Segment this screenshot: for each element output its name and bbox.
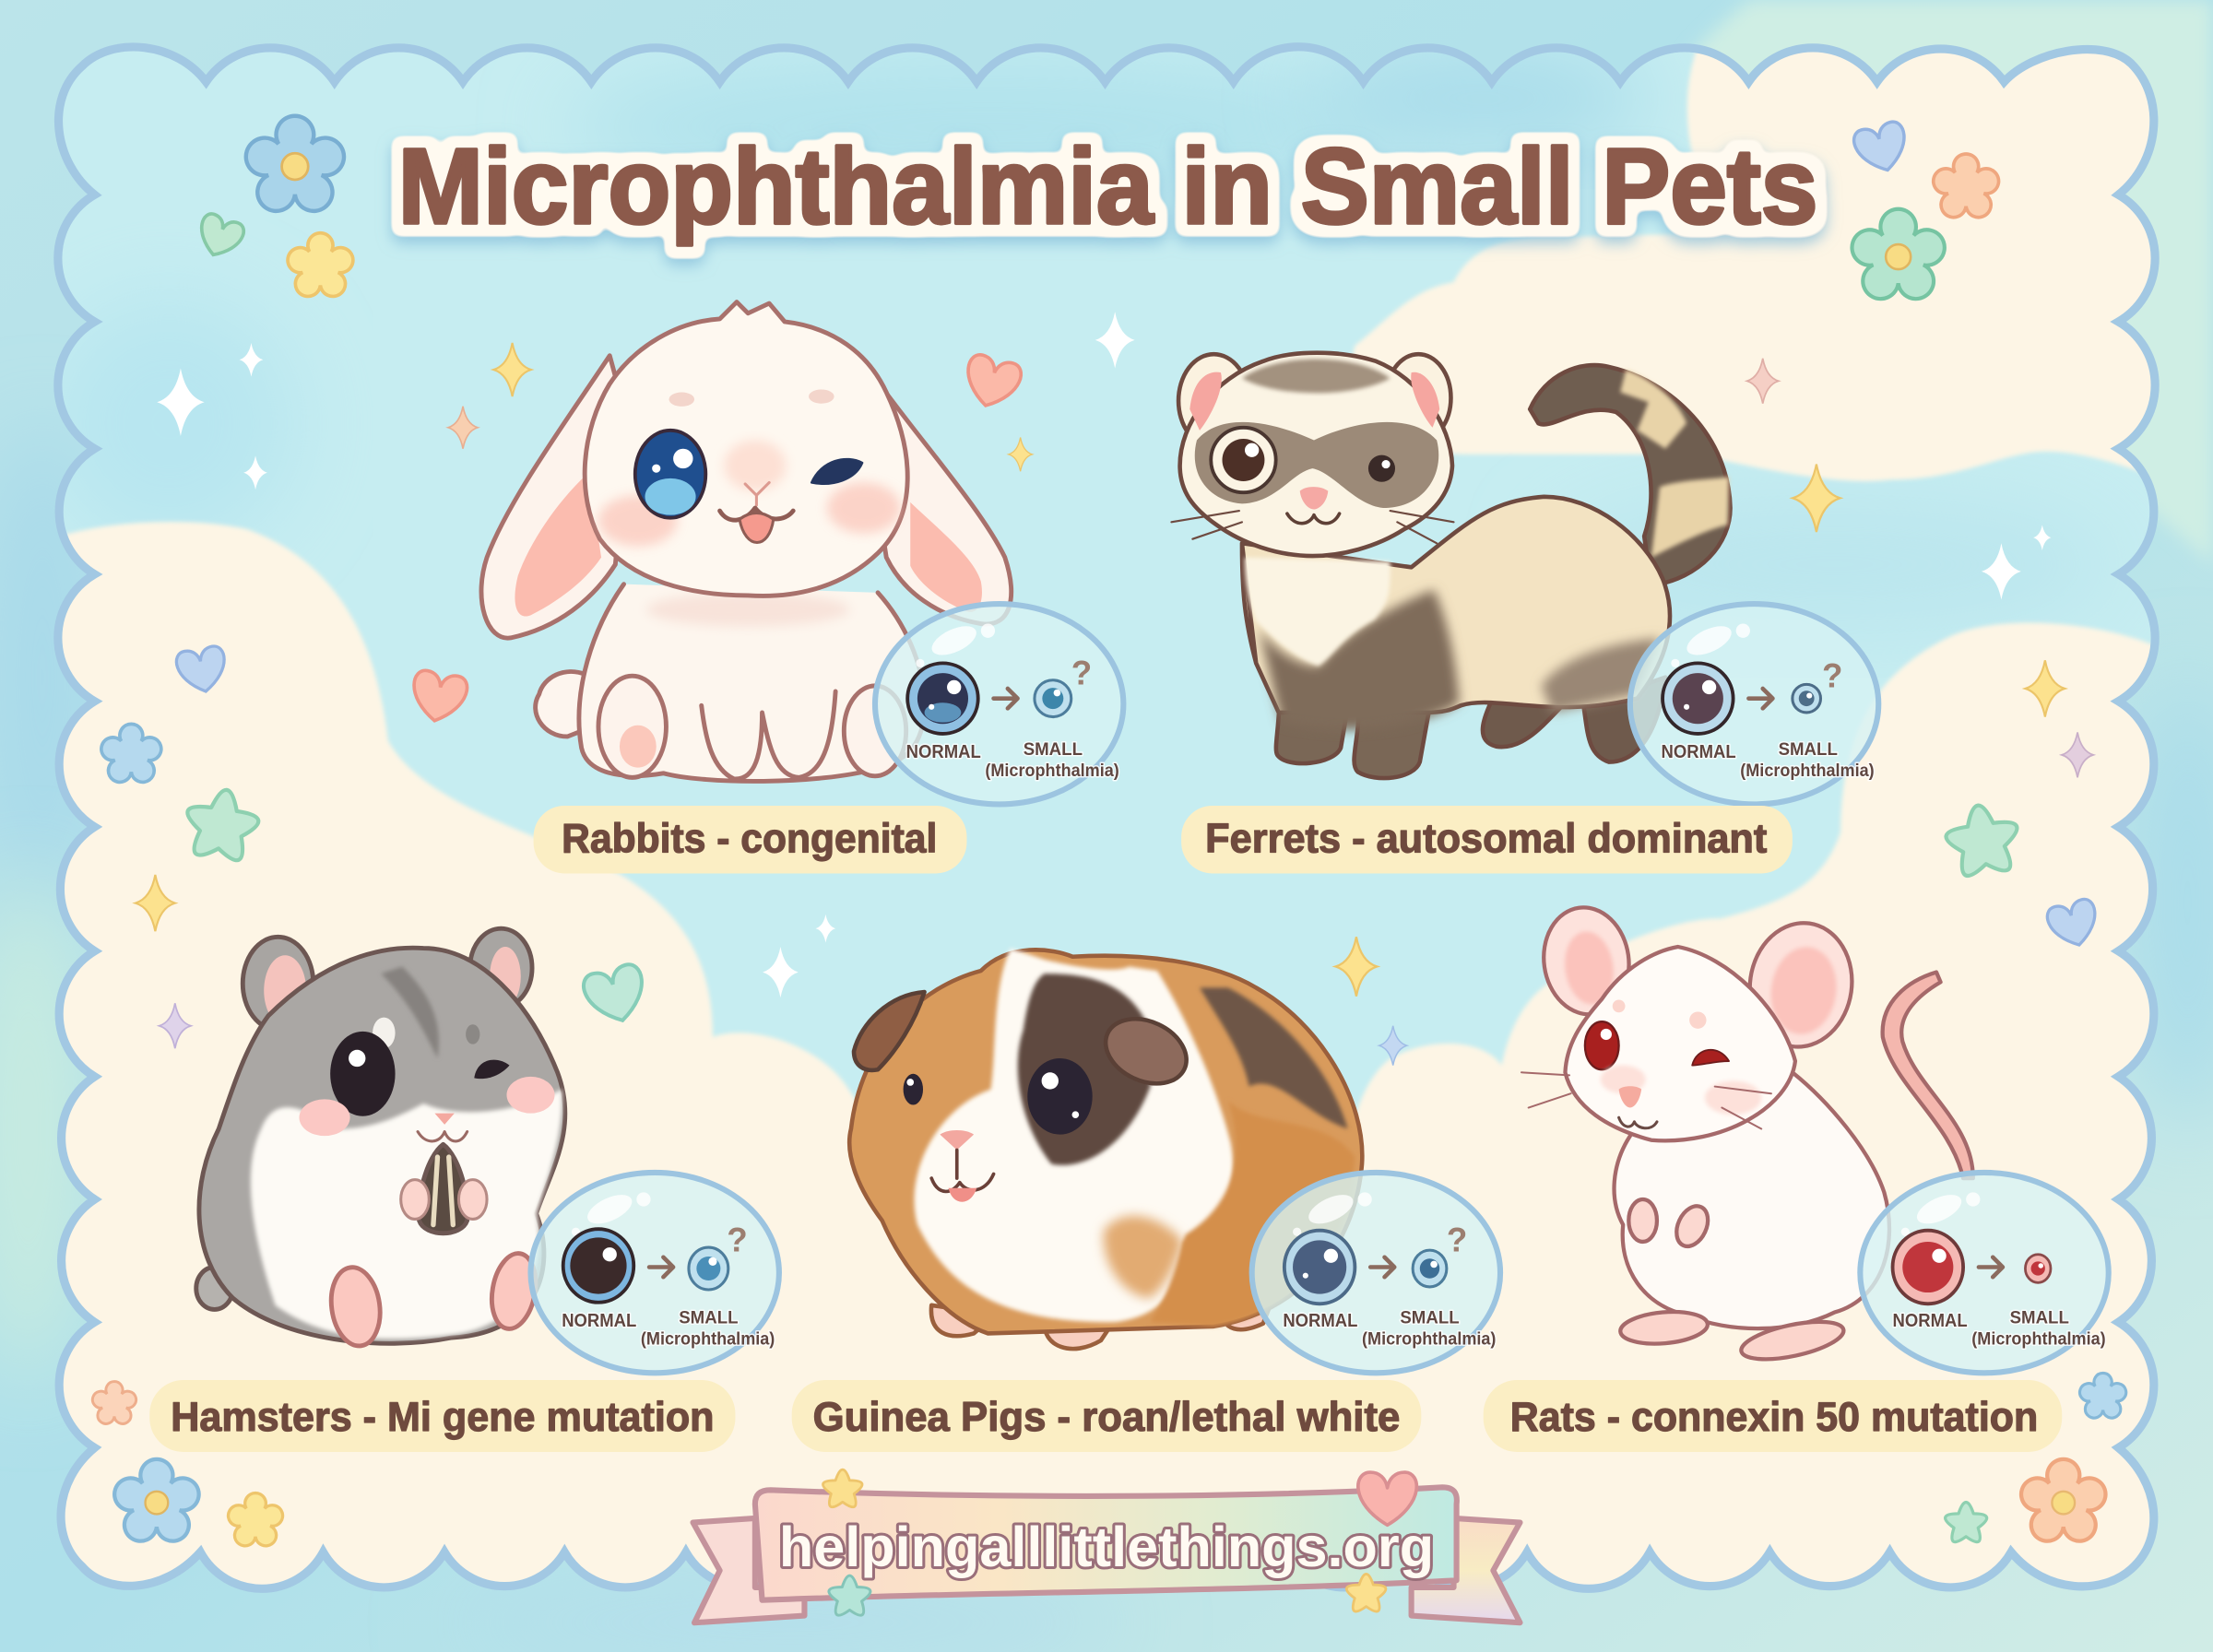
label: hamsters: Hamsters - Mi gene mutation [171, 1395, 714, 1440]
ferret ears [1178, 354, 1450, 447]
bubble labels: SMALL [2010, 1309, 2069, 1328]
rat feet [1619, 1308, 1847, 1366]
ferret illustration [1171, 353, 1731, 778]
arrow [1979, 1257, 2003, 1277]
bubble labels: SMALL [1779, 740, 1838, 760]
hamster seed and paws [401, 1144, 487, 1233]
rabbit mouth [745, 482, 769, 505]
bubble labels [1893, 1309, 2106, 1350]
ribbon tails [693, 1518, 804, 1622]
question mark: ? [1071, 654, 1092, 691]
rabbit illustration [481, 302, 1012, 781]
small eye [1793, 684, 1820, 713]
normal eye [1663, 663, 1734, 734]
label: guinea pigs [792, 1380, 1421, 1452]
bubble labels: (Microphthalmia) [1362, 1330, 1496, 1350]
ribbon stars and heart [823, 1469, 1416, 1615]
rat body [1615, 1072, 1889, 1328]
ferret bib [1245, 558, 1391, 666]
ribbon band [755, 1487, 1457, 1600]
cream clouds [1352, 42, 2160, 481]
bubble labels [1283, 1309, 1496, 1350]
hamster body [199, 948, 565, 1343]
hamster ears [243, 928, 532, 1030]
label: rats [1484, 1380, 2062, 1452]
label: guinea pigs: Guinea Pigs - roan/lethal white [813, 1395, 1400, 1440]
arrow [994, 689, 1018, 708]
bubble: rabbit eye comparison [875, 604, 1123, 804]
ferret eyes [1211, 428, 1276, 492]
rat illustration [1521, 902, 1973, 1366]
hamster eyes and cheeks [299, 1032, 555, 1141]
hamster tail [196, 1267, 233, 1309]
label: ferrets [1181, 806, 1793, 873]
normal eye [907, 663, 978, 734]
rabbit eyes [635, 431, 705, 518]
bubble labels [1662, 740, 1875, 781]
rabbit head [585, 302, 907, 596]
ferret tail [1530, 365, 1731, 585]
guinea pig body [849, 950, 1362, 1333]
rat ears [1537, 902, 1860, 1054]
guinea pig dark patch [1018, 974, 1150, 1165]
hamster illustration [196, 928, 565, 1349]
bubble: guinea pig eye comparison [1252, 1173, 1500, 1373]
bubble labels: SMALL [679, 1309, 739, 1328]
bubble: rat eye comparison [1860, 1173, 2109, 1373]
bubble labels: (Microphthalmia) [641, 1330, 775, 1350]
footer ribbon [693, 1469, 1520, 1622]
guinea pig feet [931, 1305, 1271, 1349]
decorations: flowers, hearts and sparkles [92, 116, 2126, 1546]
bubble labels [906, 740, 1119, 781]
rabbit legs [598, 676, 906, 779]
arrow [1370, 1257, 1394, 1277]
small eye [2025, 1255, 2051, 1282]
bubble labels: (Microphthalmia) [1740, 761, 1875, 781]
ferret front legs [1276, 684, 1433, 778]
rat tail [1883, 973, 1973, 1178]
ferret dark underbody [1259, 590, 1460, 730]
guinea pig illustration [849, 949, 1362, 1349]
bubble labels: SMALL [1024, 740, 1083, 760]
normal eye [1284, 1231, 1355, 1304]
rat arms [1628, 1199, 1714, 1251]
rabbit ears [481, 356, 1012, 638]
small eye [689, 1247, 728, 1290]
normal eye [563, 1229, 633, 1303]
hamster feet [326, 1250, 541, 1349]
hamster belly [251, 1090, 562, 1339]
arrow [1748, 689, 1772, 708]
rat head [1565, 947, 1795, 1140]
ferret hind legs [1483, 678, 1665, 762]
label: rabbits: Rabbits - congenital [562, 816, 937, 861]
rat face [1521, 999, 1771, 1128]
small eye [1035, 680, 1071, 717]
ferret head [1171, 353, 1454, 556]
question mark: ? [727, 1221, 748, 1259]
bubble: hamster eye comparison [531, 1173, 779, 1373]
label: ferrets: Ferrets - autosomal dominant [1205, 816, 1768, 861]
label: rabbits [534, 806, 966, 873]
small eye [1413, 1250, 1447, 1287]
guinea pig white markings [915, 949, 1233, 1322]
label: hamsters [149, 1380, 735, 1452]
arrow [649, 1257, 673, 1277]
bubble labels: NORMAL [562, 1311, 636, 1331]
ferret nose and mouth [1300, 487, 1328, 510]
bubble labels: SMALL [1400, 1309, 1460, 1328]
guinea pig face [904, 1058, 1093, 1202]
bubble labels [562, 1309, 775, 1350]
website url: helpingalllittlethings.org [779, 1516, 1434, 1578]
guinea pig lower orange patch [1104, 1216, 1183, 1298]
bubble labels: (Microphthalmia) [985, 761, 1119, 781]
guinea pig dark streaks [1200, 987, 1348, 1128]
ferret body [1242, 497, 1670, 713]
guinea pig ears [854, 992, 1197, 1096]
title: Microphthalmia in Small Pets [398, 126, 1817, 246]
bubble labels: NORMAL [1662, 742, 1736, 762]
bubble labels: NORMAL [1283, 1311, 1357, 1331]
label: rats: Rats - connexin 50 mutation [1510, 1395, 2038, 1440]
question mark: ? [1447, 1221, 1467, 1259]
bubble labels: (Microphthalmia) [1971, 1330, 2106, 1350]
rabbit tail [536, 672, 593, 737]
guinea pig right orange patch [1150, 1101, 1355, 1327]
question mark: ? [1822, 656, 1842, 694]
bubble: ferret eye comparison [1630, 604, 1878, 804]
rabbit body [579, 584, 925, 781]
bubble labels: NORMAL [906, 742, 981, 762]
normal eye [1893, 1231, 1963, 1304]
bubble labels: NORMAL [1893, 1311, 1968, 1331]
